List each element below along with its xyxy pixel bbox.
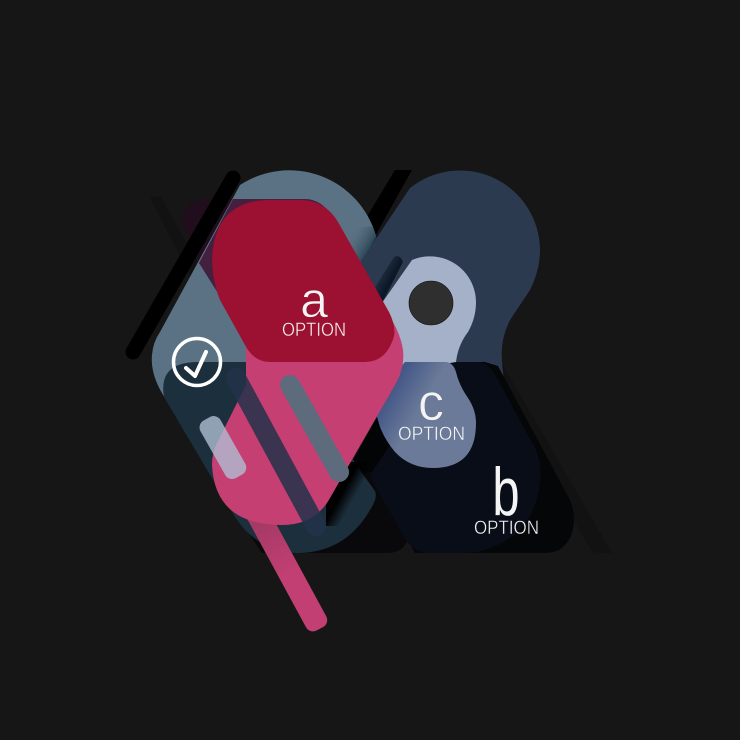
dark edge gradient on blue (340, 226, 377, 275)
faint background shapes (150, 196, 612, 553)
black trapezoid behind b (372, 362, 574, 553)
label: option b: b (492, 453, 520, 530)
black wedge between pink and c (345, 385, 400, 475)
dark navy panel of b (371, 362, 540, 553)
option a red shape (212, 200, 394, 362)
black diagonal bar top centre (350, 170, 412, 245)
pale diagonal bar (197, 413, 249, 482)
navy upper blob (335, 170, 540, 480)
disc hole (409, 281, 453, 325)
label: option a (282, 272, 346, 341)
translucent navy diagonal bar (236, 378, 316, 526)
pink lower bar (236, 488, 330, 634)
label: option c: OPTION (398, 424, 465, 445)
purple shape behind a (199, 199, 365, 360)
black diagonal bar left (133, 178, 233, 352)
blue grey body (152, 170, 376, 398)
label: option b: OPTION (474, 518, 539, 539)
label: option c: c (418, 374, 444, 432)
light blue ring shape with hole (370, 256, 476, 375)
dark maroon shape behind bar (183, 199, 235, 263)
option c shape (372, 362, 476, 468)
black shadow shape bottom left (240, 470, 408, 553)
dark teal lower body (163, 362, 385, 553)
label: option b (474, 453, 539, 539)
label: option c (398, 374, 465, 445)
grey diagonal bar (290, 385, 339, 472)
shadow stripe on navy (372, 256, 403, 303)
light disc body (370, 256, 476, 375)
panel: option b dark shapes (371, 362, 574, 553)
label: option a: a (300, 272, 328, 328)
panel: blue grey shape (152, 170, 377, 398)
label: option a: OPTION (282, 320, 346, 341)
icon: check mark in circle (174, 338, 220, 386)
pink shape (212, 310, 403, 525)
shadow strip beside pink shape (326, 462, 378, 526)
